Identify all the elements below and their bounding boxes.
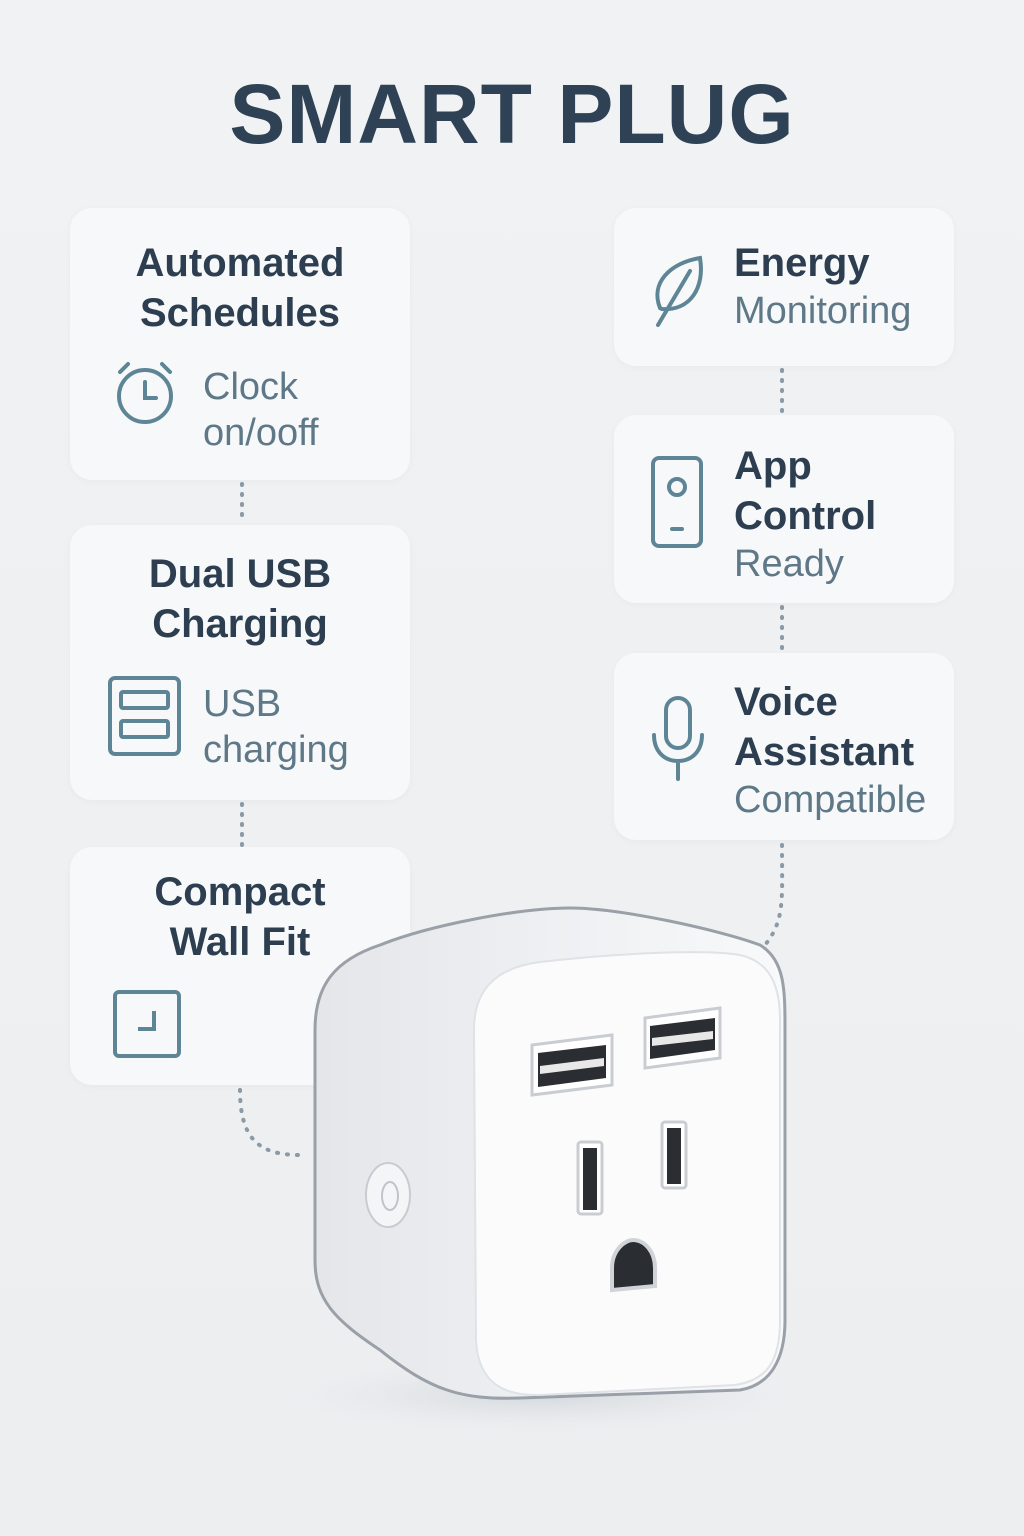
- illustration: smart plug: [314, 906, 786, 1413]
- heading: Compact: [154, 870, 326, 914]
- panel: energy monitoring: [614, 208, 954, 366]
- heading: Wall Fit: [170, 920, 310, 964]
- outlet slots: [578, 1142, 602, 1214]
- side button: [366, 1163, 410, 1227]
- panel: automated schedules: [70, 208, 410, 480]
- text: Compatible: [734, 779, 926, 821]
- text: Energy: [734, 241, 870, 285]
- text: on/ooff: [203, 412, 319, 454]
- icon: leaf: [655, 256, 703, 328]
- text: [734, 680, 926, 821]
- text: Control: [734, 494, 876, 538]
- panel: dual usb: [70, 525, 410, 800]
- text: Assistant: [734, 730, 914, 774]
- text: App: [734, 444, 812, 488]
- text: [734, 241, 911, 332]
- heading: Automated: [136, 241, 344, 285]
- icon: phone: [651, 456, 703, 548]
- heading: [136, 241, 344, 335]
- panel: voice assistant: [614, 653, 954, 840]
- text: Monitoring: [734, 290, 911, 332]
- shadow: [260, 1355, 820, 1435]
- text: [734, 444, 876, 585]
- icon: usb: [108, 676, 181, 756]
- heading: Dual USB: [149, 552, 331, 596]
- panel: app control: [614, 415, 954, 603]
- heading: Schedules: [140, 291, 340, 335]
- text: USB: [203, 683, 281, 725]
- body: [315, 908, 785, 1398]
- text: charging: [203, 729, 349, 771]
- title: SMART PLUG: [229, 67, 795, 161]
- heading: [154, 870, 326, 964]
- text: Ready: [734, 543, 844, 585]
- heading: Charging: [152, 602, 328, 646]
- text: Voice: [734, 680, 838, 724]
- icon: microphone: [652, 696, 704, 781]
- text: [203, 366, 319, 454]
- icon: clock: [117, 362, 173, 424]
- front face: [474, 952, 780, 1395]
- text: [203, 683, 349, 771]
- heading: [149, 552, 331, 646]
- usb ports: [532, 1035, 612, 1095]
- icon: square: [113, 990, 181, 1058]
- panel: compact wall fit: [70, 847, 410, 1085]
- text: Clock: [203, 366, 298, 408]
